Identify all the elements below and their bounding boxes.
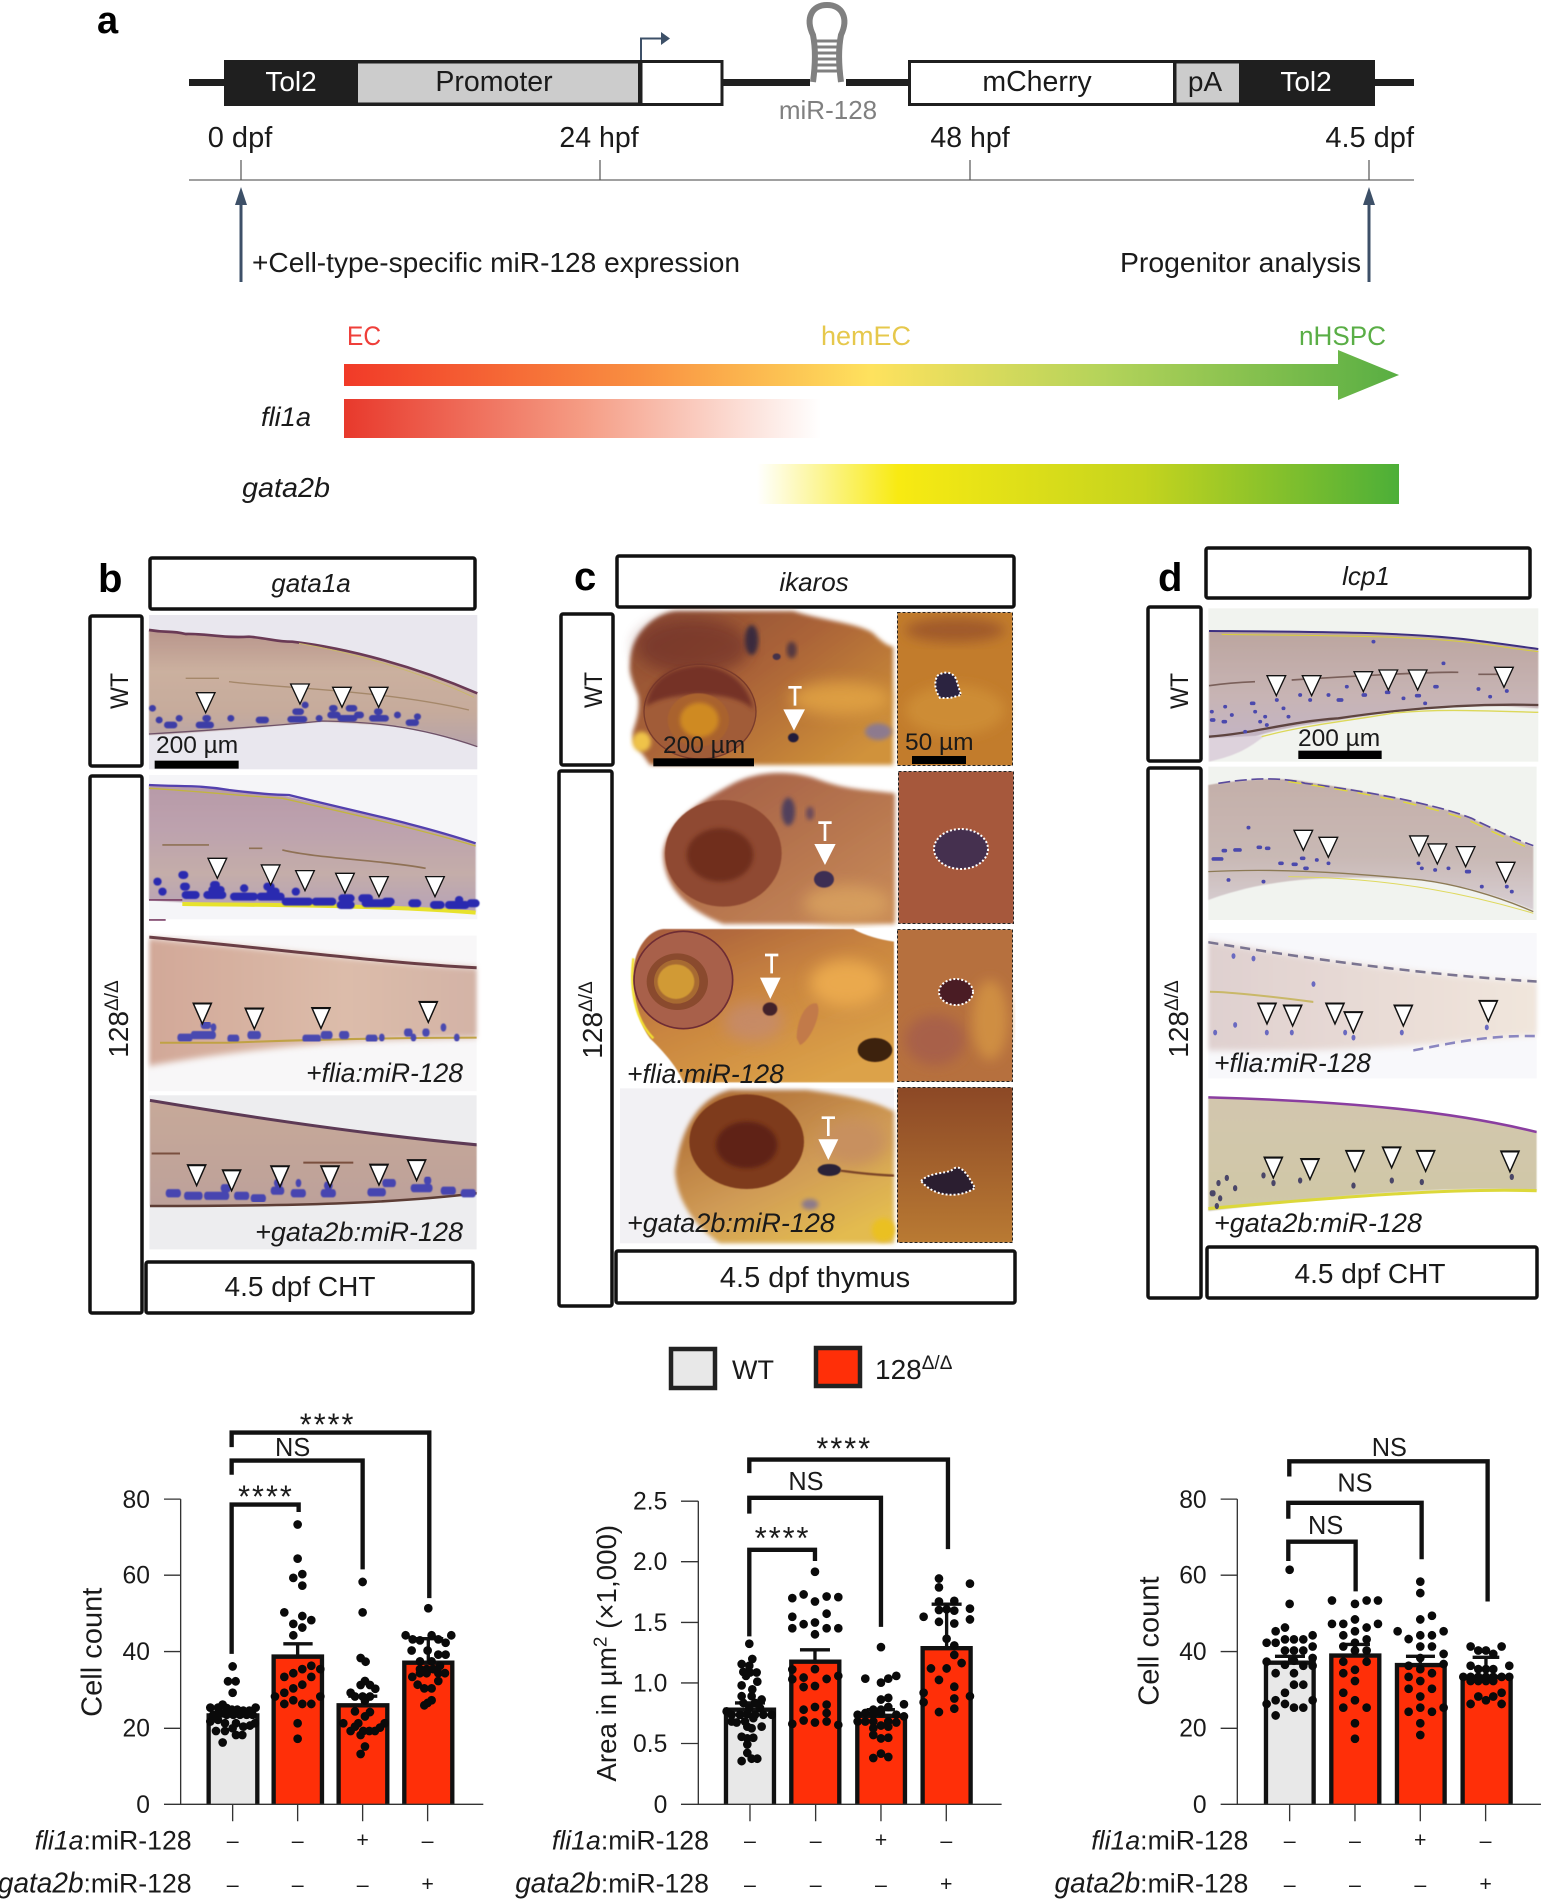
brackets xyxy=(1288,1434,1488,1602)
axes xyxy=(164,1499,483,1821)
label gata2b: +gata2b:miR-128 xyxy=(255,1217,463,1247)
legend swatch WT xyxy=(671,1349,715,1388)
legend text 128: 128 xyxy=(875,1354,922,1385)
panel: a construct and timeline xyxy=(97,0,1415,504)
y axis title: Area in µm xyxy=(591,1647,622,1782)
row labels: gata2b:miR-128 xyxy=(515,1866,709,1899)
brackets xyxy=(749,1431,948,1636)
row label 128: Δ/Δ xyxy=(1162,980,1183,1011)
chart: b cell count xyxy=(0,1407,483,1899)
legend text 128: Δ/Δ xyxy=(922,1353,953,1374)
timeline: 0 dpf xyxy=(208,122,273,154)
footer box xyxy=(146,1262,473,1313)
row labels: – xyxy=(744,1828,756,1853)
arrow: miR-128 expression start xyxy=(235,187,247,282)
chart: d cell count xyxy=(1055,1434,1541,1899)
axes xyxy=(681,1501,1002,1821)
header ikaros xyxy=(617,556,1014,607)
error bars xyxy=(1275,1644,1499,1677)
panel letter d: d xyxy=(1158,556,1182,600)
row labels: gata2b:miR-128 xyxy=(1055,1866,1248,1899)
legend xyxy=(671,1348,953,1388)
row labels: – xyxy=(940,1828,952,1853)
image: 128 tail xyxy=(149,775,477,920)
brackets: **** xyxy=(300,1407,356,1442)
bars xyxy=(1266,1656,1511,1804)
construct diagram: Promoter xyxy=(435,66,553,98)
gradient arrow: differentiation xyxy=(344,350,1399,400)
panel letter c: c xyxy=(574,555,596,599)
row labels: – xyxy=(1349,1828,1361,1853)
brackets: NS xyxy=(275,1434,310,1462)
error bars xyxy=(735,1604,962,1710)
text: progenitor analysis: Progenitor analysis xyxy=(1120,247,1361,278)
y tick labels: 40 xyxy=(123,1639,150,1666)
row labels: – xyxy=(1414,1872,1426,1897)
y tick labels: 0 xyxy=(654,1792,667,1819)
label gata2b: +gata2b:miR-128 xyxy=(1214,1208,1422,1238)
scale label: 50 µm xyxy=(905,729,974,756)
panel letter b: b xyxy=(98,557,122,601)
y tick labels: 0.5 xyxy=(633,1731,667,1758)
row labels: – xyxy=(357,1872,369,1897)
y tick labels: 20 xyxy=(1179,1716,1207,1743)
label fli1a: fli1a xyxy=(261,402,311,432)
row labels: – xyxy=(227,1828,239,1853)
construct diagram xyxy=(189,60,1414,106)
row labels: fli1a:miR-128 xyxy=(552,1825,709,1855)
construct diagram: pA xyxy=(1188,66,1222,97)
row labels: – xyxy=(422,1828,434,1853)
bar: fli1a window xyxy=(344,399,821,438)
construct diagram: Tol2 xyxy=(265,66,317,97)
y tick labels xyxy=(633,1488,667,1819)
data points xyxy=(1267,1570,1509,1739)
image: WT tail xyxy=(1208,608,1538,762)
y tick labels: 20 xyxy=(123,1716,150,1743)
construct diagram: mCherry xyxy=(982,66,1092,98)
label gata2b: gata2b xyxy=(242,472,330,503)
row labels: – xyxy=(1480,1828,1492,1853)
brackets: **** xyxy=(816,1431,872,1466)
row labels: – xyxy=(292,1872,304,1897)
footer box: 4.5 dpf CHT xyxy=(225,1271,375,1302)
stage labels: hemEC xyxy=(821,321,911,351)
scale label: 200 µm xyxy=(1298,725,1380,752)
row labels: – xyxy=(1284,1872,1296,1897)
bar: gata2b window xyxy=(757,464,1399,504)
stage labels: nHSPC xyxy=(1299,321,1386,351)
row labels: + xyxy=(1414,1828,1427,1852)
image: flia tail xyxy=(1208,933,1537,1078)
inset: gata2b thymus xyxy=(898,1088,1012,1242)
row labels: fli1a:miR-128 xyxy=(1091,1825,1248,1855)
header gata1a: gata1a xyxy=(271,568,351,598)
y tick labels xyxy=(123,1487,150,1819)
icon: miR-128 hairpin xyxy=(810,5,846,88)
row labels: – xyxy=(875,1872,887,1897)
image: gata2b head xyxy=(620,1088,895,1243)
label flia: +flia:miR-128 xyxy=(1214,1048,1371,1078)
brackets: NS xyxy=(788,1468,824,1496)
row label WT xyxy=(561,614,613,765)
image: WT head xyxy=(630,611,893,766)
image: gata2b tail xyxy=(1208,1097,1537,1211)
row label 128 xyxy=(90,776,142,1313)
row labels: – xyxy=(810,1872,822,1897)
row labels xyxy=(0,1825,434,1899)
y tick labels: 80 xyxy=(123,1487,150,1514)
y tick labels: 2.0 xyxy=(633,1549,667,1576)
brackets: NS xyxy=(1372,1434,1407,1462)
timeline xyxy=(189,122,1415,180)
axes xyxy=(1221,1499,1541,1821)
y tick labels: 40 xyxy=(1179,1639,1207,1666)
y tick labels: 2.5 xyxy=(633,1488,667,1516)
row labels: + xyxy=(875,1828,887,1852)
image: flia head xyxy=(620,928,894,1082)
image: WT tail xyxy=(149,615,477,769)
row labels xyxy=(1055,1825,1492,1899)
panel letter a: a xyxy=(97,0,119,42)
image: 128 tail xyxy=(1208,767,1537,920)
footer box xyxy=(616,1251,1015,1303)
brackets xyxy=(232,1407,429,1654)
legend swatch 128 xyxy=(816,1348,860,1386)
row labels: gata2b:miR-128 xyxy=(0,1866,192,1899)
footer box: 4.5 dpf CHT xyxy=(1295,1258,1445,1289)
row label 128: 128 xyxy=(103,1011,134,1058)
row label 128: 128 xyxy=(577,1012,608,1059)
construct diagram: Tol2 xyxy=(1280,66,1332,97)
timeline: 24 hpf xyxy=(559,122,639,154)
panel: d lcp1 in situ xyxy=(1148,548,1538,1298)
y tick labels: 60 xyxy=(1179,1562,1207,1590)
legend text WT: WT xyxy=(732,1355,774,1385)
row labels: + xyxy=(421,1872,434,1896)
bars xyxy=(209,1657,452,1804)
y axis title: Cell count xyxy=(77,1588,109,1717)
y axis title: 2 xyxy=(590,1637,611,1647)
stage labels xyxy=(347,321,1386,351)
label miR-128: miR-128 xyxy=(779,95,877,125)
scale label: 200 µm xyxy=(663,732,745,759)
brackets: **** xyxy=(238,1479,294,1514)
row labels: + xyxy=(940,1872,953,1896)
row labels: – xyxy=(810,1828,822,1853)
footer box: 4.5 dpf thymus xyxy=(720,1262,910,1294)
error bars xyxy=(217,1639,443,1718)
row labels xyxy=(515,1825,953,1899)
y tick labels: 60 xyxy=(123,1562,150,1590)
header lcp1: lcp1 xyxy=(1342,561,1390,591)
row labels: + xyxy=(1479,1872,1492,1896)
footer box xyxy=(1207,1247,1537,1298)
row labels: – xyxy=(227,1872,239,1897)
scale label: 200 µm xyxy=(156,732,238,759)
row label 128 xyxy=(559,771,612,1306)
image: 128 head xyxy=(620,769,895,924)
inset: 128 thymus xyxy=(898,772,1014,924)
stage labels: EC xyxy=(347,321,381,351)
brackets: **** xyxy=(755,1520,811,1556)
header gata1a xyxy=(150,558,475,609)
chart: c thymus area xyxy=(515,1431,1002,1899)
row labels: fli1a:miR-128 xyxy=(35,1825,192,1855)
row label 128: Δ/Δ xyxy=(102,980,123,1011)
brackets: NS xyxy=(1308,1512,1343,1540)
timeline: 48 hpf xyxy=(930,122,1010,154)
bars xyxy=(726,1648,971,1804)
timeline: 4.5 dpf xyxy=(1325,122,1415,154)
icon: transcription start arrow xyxy=(641,32,670,60)
image: flia miR-128 tail xyxy=(148,936,477,1091)
row label WT: WT xyxy=(1166,673,1194,709)
panel: c ikaros in situ xyxy=(559,555,1015,1306)
y tick labels: 1.0 xyxy=(633,1670,667,1697)
y axis title: (×1,000) xyxy=(591,1525,622,1637)
y tick labels xyxy=(1179,1487,1207,1819)
label gata2b: +gata2b:miR-128 xyxy=(627,1208,835,1238)
row label WT: WT xyxy=(106,673,134,709)
row label 128: Δ/Δ xyxy=(576,981,597,1012)
panel: b gata1a in situ xyxy=(90,557,477,1313)
arrow: progenitor analysis xyxy=(1363,187,1375,282)
row label WT xyxy=(1148,607,1201,761)
header ikaros: ikaros xyxy=(779,567,849,597)
row labels: – xyxy=(1349,1872,1361,1897)
y tick labels: 1.5 xyxy=(633,1610,667,1637)
y tick labels: 80 xyxy=(1179,1487,1207,1514)
y tick labels: 0 xyxy=(136,1792,150,1819)
row label 128: 128 xyxy=(1163,1011,1194,1058)
text: expression: +Cell-type-specific miR-128 expression xyxy=(252,247,740,278)
row label 128 xyxy=(1148,768,1201,1298)
data points xyxy=(210,1524,451,1754)
row labels: – xyxy=(744,1872,756,1897)
label flia: +flia:miR-128 xyxy=(306,1058,463,1088)
header lcp1 xyxy=(1206,548,1530,598)
y tick labels: 0 xyxy=(1193,1792,1207,1819)
row labels: – xyxy=(1284,1828,1296,1853)
row labels: + xyxy=(356,1828,369,1852)
row label WT: WT xyxy=(580,672,608,708)
label flia: +flia:miR-128 xyxy=(627,1059,784,1089)
row label WT xyxy=(90,616,142,766)
data points xyxy=(727,1572,970,1761)
inset: flia thymus xyxy=(898,930,1012,1082)
image: gata2b miR-128 tail xyxy=(149,1095,477,1249)
row labels: – xyxy=(292,1828,304,1853)
brackets: NS xyxy=(1337,1470,1373,1498)
y axis title: Cell count xyxy=(1133,1576,1165,1706)
inset: WT thymus xyxy=(898,612,1012,766)
